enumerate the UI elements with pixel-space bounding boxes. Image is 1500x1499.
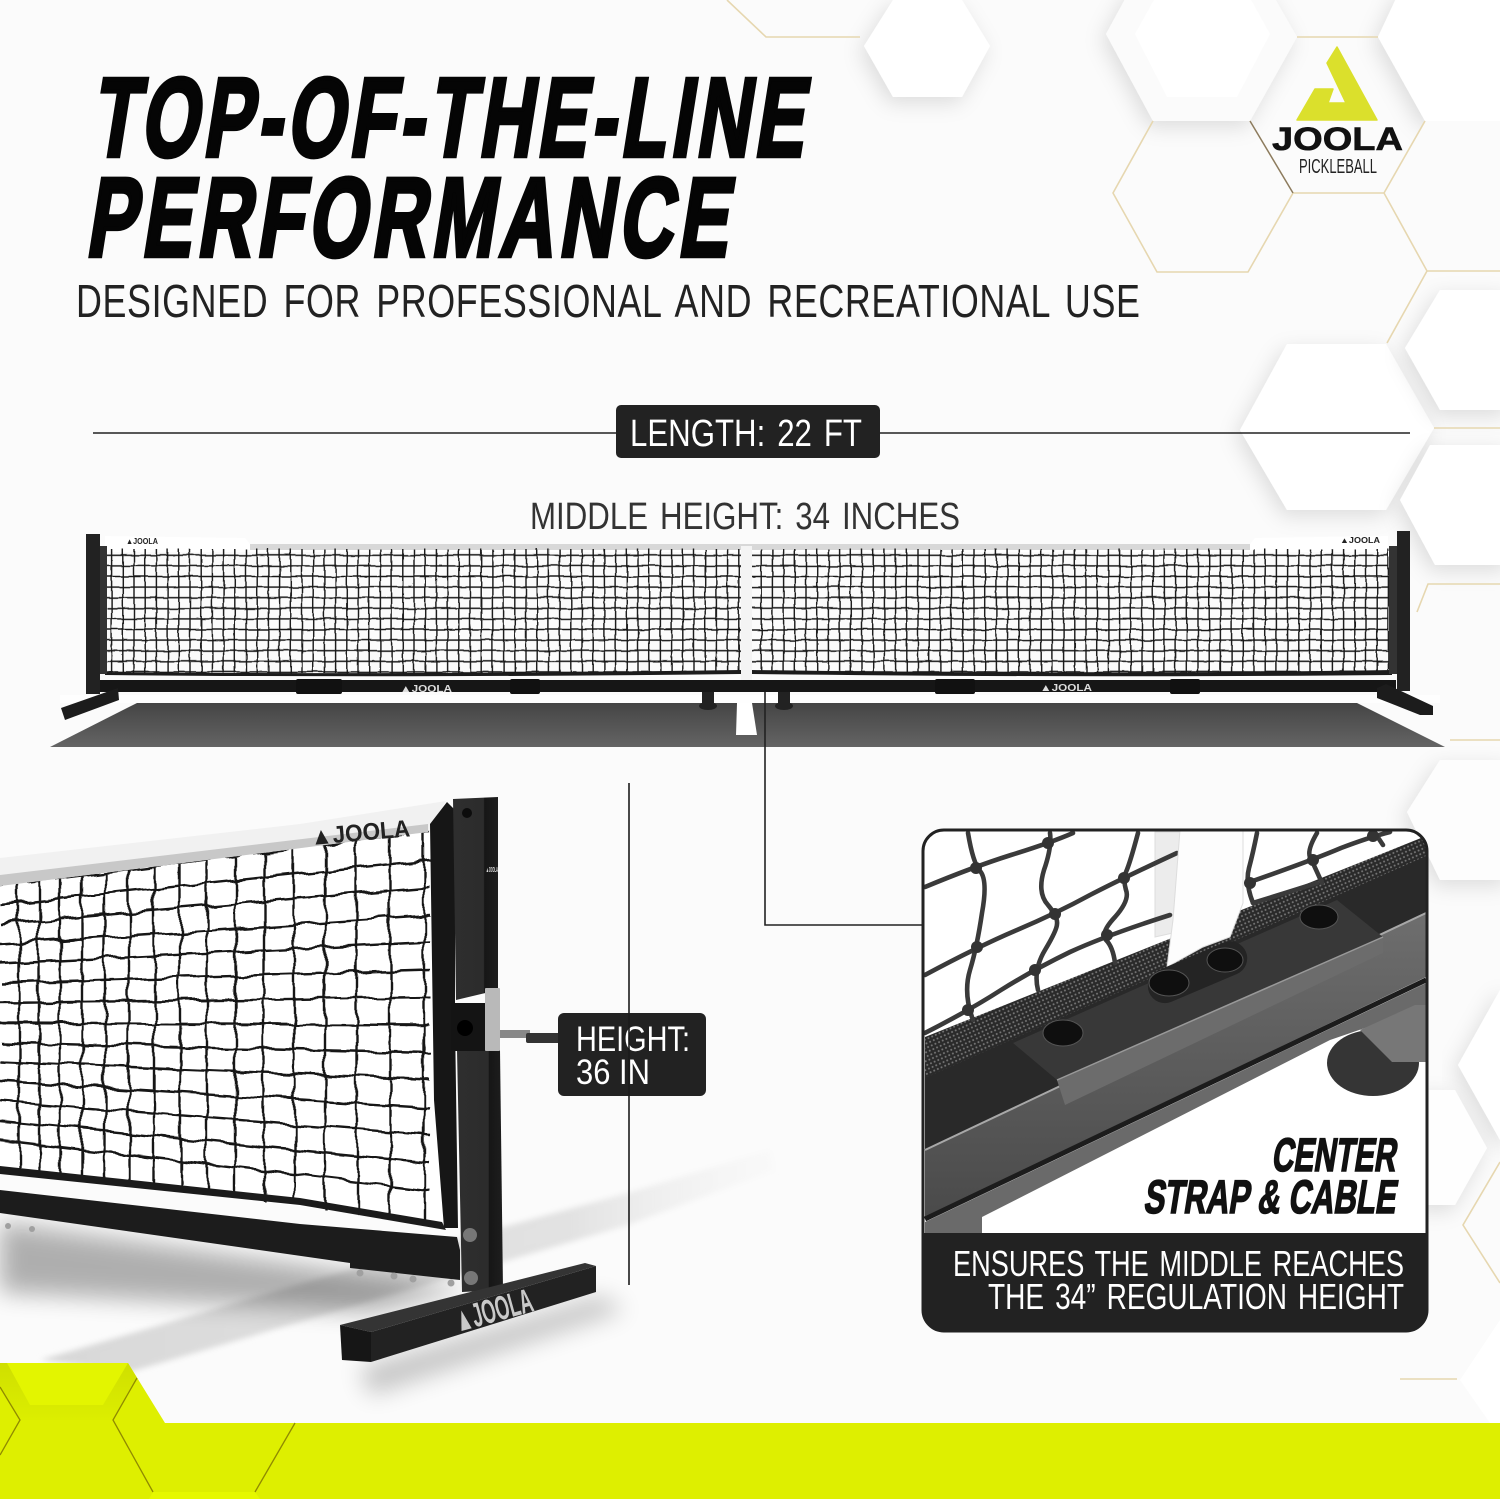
front face of rail: [925, 913, 1426, 1217]
foot bracket: [1360, 1005, 1426, 1062]
strap front: [1167, 830, 1243, 967]
panel heading: [1141, 1129, 1402, 1224]
label: middle height: MIDDLE HEIGHT: 34 INCHES: [530, 496, 960, 538]
post lower: [457, 1050, 503, 1292]
floor shadows: [40, 1150, 775, 1372]
top band: [105, 536, 1388, 552]
callout: height 36 in: 36 IN: [576, 1053, 650, 1092]
right post: [1397, 531, 1410, 691]
small logos: ▲JOOLA: [126, 537, 158, 546]
close-up: net post and base: [0, 797, 775, 1395]
screw plate and screws: [1148, 942, 1248, 1003]
panel: center strap and cable: [923, 830, 1427, 1333]
bottom lime band: [0, 1363, 1500, 1499]
panel description: [953, 1243, 1404, 1317]
net side binding: [430, 802, 458, 1228]
callout: height 36 in: HEIGHT:: [576, 1020, 690, 1059]
net mesh lines: [0, 832, 430, 1220]
net top band: [0, 801, 446, 886]
net knots: [962, 830, 1379, 1016]
post upper: [453, 797, 498, 1000]
left post: [86, 534, 100, 694]
panel heading: CENTER: [1269, 1129, 1402, 1182]
callout: height 36 in: [558, 1013, 706, 1096]
dimension line: height: [628, 783, 630, 1285]
T-base: [371, 1266, 596, 1362]
subtitle: DESIGNED FOR PROFESSIONAL AND RECREATIONAL USE: [76, 276, 1140, 327]
floor: [50, 703, 1445, 747]
strap: [1155, 832, 1180, 937]
logo: JOOLA Pickleball: PICKLEBALL: [1299, 156, 1377, 178]
top face of rail: [925, 856, 1426, 1150]
full net product image: ▲JOOLA: [1040, 683, 1092, 694]
text background band: [924, 1233, 1426, 1333]
net mesh: [107, 549, 1389, 673]
JOOLA on band: ▲JOOLA: [309, 815, 411, 851]
lower rail: [925, 983, 1426, 1235]
mesh binding band: [925, 836, 1426, 1082]
logo: JOOLA Pickleball: [1272, 47, 1403, 178]
net white background: [0, 830, 445, 1225]
background: hexagon pattern: [727, 0, 1500, 1423]
close-up: net post and base: ▲JOOLA: [486, 867, 498, 874]
title: [81, 55, 818, 280]
lower rail: [0, 1190, 460, 1280]
connector line to center strap panel: [765, 692, 924, 925]
full net product image: ▲JOOLA: [1340, 536, 1380, 545]
bracket plate: [1013, 900, 1383, 1080]
dimension line: length: [93, 405, 1410, 458]
full net product image: [50, 531, 1445, 747]
rail: [100, 680, 1396, 692]
title: PERFORMANCE: [81, 156, 743, 280]
JOOLA on base: ▲JOOLA: [450, 1282, 537, 1340]
center strap: [741, 546, 752, 682]
knotted net strands: [925, 832, 1390, 1033]
foot: [1327, 1030, 1419, 1096]
dimension line: length: LENGTH: 22 FT: [630, 413, 862, 455]
clamp: [451, 1003, 485, 1051]
title: TOP-OF-THE-LINE: [87, 55, 818, 181]
logo: JOOLA Pickleball: JOOLA: [1272, 121, 1403, 157]
full net product image: ▲JOOLA: [400, 684, 452, 695]
net bottom binding: [105, 670, 1392, 676]
